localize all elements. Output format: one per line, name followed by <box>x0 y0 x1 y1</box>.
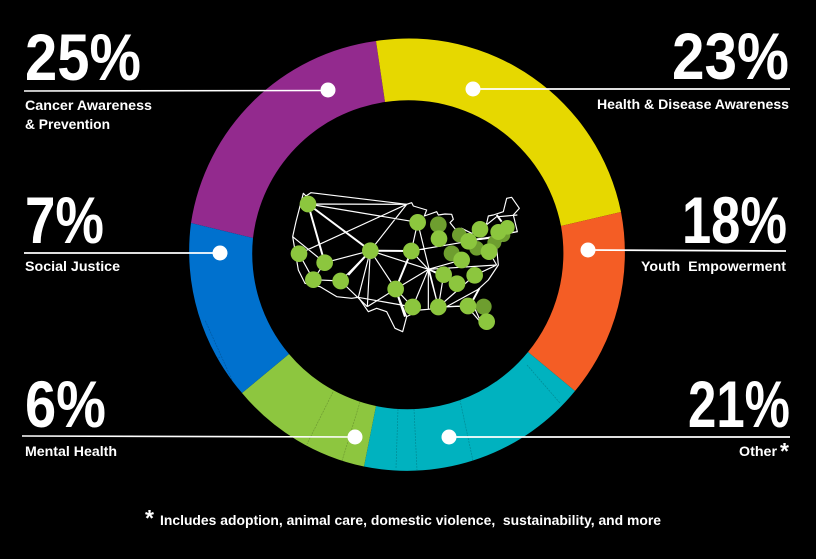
segment: purple 25% <box>191 41 385 238</box>
segment: orange 18% <box>528 212 625 391</box>
callout: 21% other: Other <box>739 443 778 459</box>
footnote: * <box>145 505 154 531</box>
callout: 23% health and disease awareness: 23% <box>672 19 789 93</box>
callout: 18% youth empowerment <box>580 183 787 274</box>
callout: 25% cancer awareness: & Prevention <box>25 116 110 132</box>
donut chart <box>189 38 625 471</box>
callout: 6% mental health: 6% <box>25 367 106 441</box>
callout: 6% mental health: Mental Health <box>25 443 117 459</box>
map of the United States <box>291 193 519 332</box>
segment seams <box>196 320 560 470</box>
callout: 25% cancer awareness <box>24 20 336 132</box>
callout: 18% youth empowerment: Youth Empowerment <box>641 258 786 274</box>
callout: 21% other: * <box>780 438 789 464</box>
map outline <box>293 193 519 332</box>
callout: 18% youth empowerment: 18% <box>682 183 787 257</box>
callout: 7% social justice: 7% <box>25 183 104 257</box>
callout: 6% mental health <box>22 367 362 459</box>
callout: 21% other <box>442 367 790 464</box>
segment: blue 7% <box>189 223 289 393</box>
callout: 23% health and disease awareness <box>466 19 790 112</box>
network lines <box>293 204 517 317</box>
segment: green 6% <box>242 354 376 466</box>
callout: 25% cancer awareness: Cancer Awareness <box>25 97 152 113</box>
footnote: Includes adoption, animal care, domestic violence, sustainability, and more <box>160 512 661 528</box>
footnote <box>145 505 661 531</box>
callout: 25% cancer awareness: 25% <box>25 20 141 94</box>
segment: teal 21% <box>364 352 575 471</box>
callout: 7% social justice: Social Justice <box>25 258 120 274</box>
segment: yellow 23% <box>376 38 621 226</box>
callout: 23% health and disease awareness: Health & Disease Awareness <box>597 96 789 112</box>
map hubs <box>291 196 515 330</box>
callout: 7% social justice <box>24 183 228 274</box>
